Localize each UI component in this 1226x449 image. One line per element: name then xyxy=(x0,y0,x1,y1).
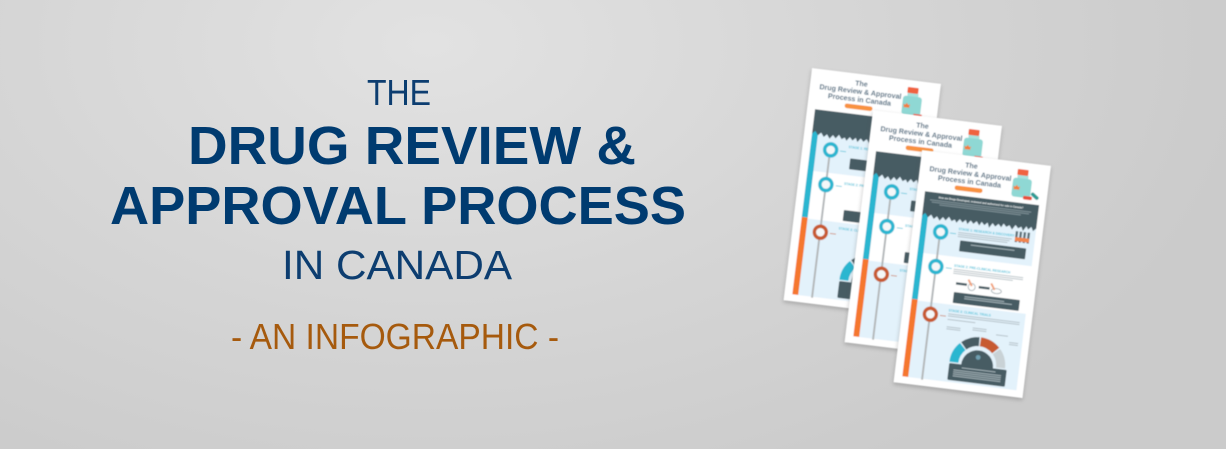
dark boxes xyxy=(904,200,977,271)
stage markers xyxy=(813,143,837,239)
icon: test tubes xyxy=(1014,231,1030,244)
page title: Drug Review & Approval xyxy=(880,125,963,143)
stage headings xyxy=(948,227,1016,319)
timeline line xyxy=(811,155,831,298)
stage markers xyxy=(874,185,898,281)
document mockup: front page xyxy=(893,150,1051,400)
arc chart xyxy=(949,334,1008,370)
page title: The xyxy=(965,161,978,171)
stage headings: STAGE 2: PRE-CLINICAL RESEARCH xyxy=(954,264,1011,275)
page title: Process in Canada xyxy=(827,92,891,108)
timeline line xyxy=(872,197,892,340)
title line: IN CANADA: IN CANADA xyxy=(282,242,513,288)
stage headings xyxy=(838,145,906,237)
title pill xyxy=(954,185,983,193)
title line: DRUG REVIEW &: DRUG REVIEW & xyxy=(188,116,636,176)
stage panel 1 xyxy=(923,212,1037,266)
marker arrows xyxy=(830,151,846,234)
stage headings xyxy=(899,187,967,279)
subtitle: - AN INFOGRAPHIC - xyxy=(231,316,559,357)
timeline bars xyxy=(863,172,879,260)
dark header with drips xyxy=(812,109,929,151)
title pill xyxy=(905,145,934,153)
stage headings: STAGE 1: RESEARCH & DISCOVERY xyxy=(909,187,966,198)
page title: Process in Canada xyxy=(937,174,1001,190)
arc chart xyxy=(839,252,898,288)
page title: The xyxy=(855,79,868,89)
timeline bar: orange xyxy=(902,299,918,377)
header body lines xyxy=(929,199,1031,217)
stage markers xyxy=(923,225,947,321)
title pill xyxy=(844,103,873,111)
document mockup: back page xyxy=(783,68,941,318)
page title xyxy=(928,157,1013,191)
stage headings: STAGE 2: PRE-CLINICAL RESEARCH xyxy=(905,224,962,235)
stage headings: STAGE 3: CLINICAL TRIALS xyxy=(948,308,991,318)
icon: medicine bottle xyxy=(1011,168,1042,201)
title block xyxy=(110,72,686,357)
header question: How are Drugs Developed, reviewed and authorized for sale in Canada? xyxy=(938,196,1024,210)
icon: medicine bottle xyxy=(962,128,986,160)
page title: Drug Review & Approval xyxy=(819,83,902,101)
stage panels xyxy=(813,130,927,184)
title line: THE: THE xyxy=(367,72,431,113)
page title: The xyxy=(916,121,929,131)
arc captions xyxy=(945,324,1019,346)
timeline bars xyxy=(802,130,818,218)
title line: APPROVAL PROCESS: APPROVAL PROCESS xyxy=(110,176,686,236)
marker arrows xyxy=(940,233,956,316)
small labels and hand icons xyxy=(955,278,1002,294)
marker arrows xyxy=(891,193,907,276)
page title: Drug Review & Approval xyxy=(929,165,1012,183)
timeline line xyxy=(921,237,941,380)
icon: medicine bottle xyxy=(901,86,925,118)
dark header with drips xyxy=(922,191,1039,233)
dark callout boxes xyxy=(943,240,1026,387)
stage headings: STAGE 1: RESEARCH & DISCOVERY xyxy=(848,145,905,156)
page title: Process in Canada xyxy=(888,134,952,150)
stage body lines xyxy=(948,232,1030,328)
stage headings: STAGE 1: RESEARCH & DISCOVERY xyxy=(958,227,1015,238)
stage panels xyxy=(874,172,988,226)
dark header with drips xyxy=(873,151,990,193)
stage headings: STAGE 3: CLINICAL TRIALS xyxy=(899,268,942,278)
document mockup: middle page xyxy=(844,110,1002,360)
stage headings: STAGE 3: CLINICAL TRIALS xyxy=(838,226,881,236)
stage panel 3 xyxy=(908,301,1026,390)
page title xyxy=(879,117,964,151)
page title xyxy=(818,75,903,109)
callout text lines xyxy=(953,244,1018,382)
timeline bar: teal xyxy=(912,212,928,300)
stage headings: STAGE 2: PRE-CLINICAL RESEARCH xyxy=(844,182,901,193)
dark boxes xyxy=(833,158,916,305)
